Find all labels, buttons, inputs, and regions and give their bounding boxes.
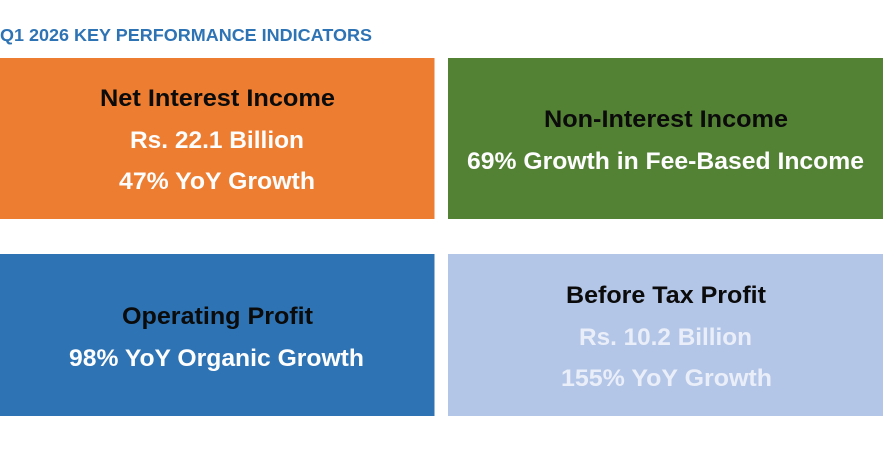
title: Q1 2026 KEY PERFORMANCE INDICATORS <box>0 25 372 45</box>
heading: non-interest income: Non-Interest Income <box>544 106 788 133</box>
panel: before tax profit <box>448 254 883 416</box>
heading: before tax profit: Before Tax Profit <box>566 282 766 309</box>
heading: operating profit: Operating Profit <box>122 303 313 330</box>
panel: operating profit <box>0 254 434 416</box>
value: net interest income growth: 47% YoY Growth <box>119 168 315 195</box>
panel: net interest income <box>0 58 434 219</box>
value: fee-based income growth: 69% Growth in Fee-Based Income <box>467 148 864 175</box>
heading: net interest income: Net Interest Income <box>100 85 335 112</box>
value: organic growth: 98% YoY Organic Growth <box>69 345 364 372</box>
value: net interest income amount: Rs. 22.1 Billion <box>130 127 304 154</box>
value: before tax profit amount: Rs. 10.2 Billion <box>579 324 752 351</box>
panel: non-interest income <box>448 58 883 219</box>
value: before tax profit growth: 155% YoY Growth <box>561 365 772 392</box>
